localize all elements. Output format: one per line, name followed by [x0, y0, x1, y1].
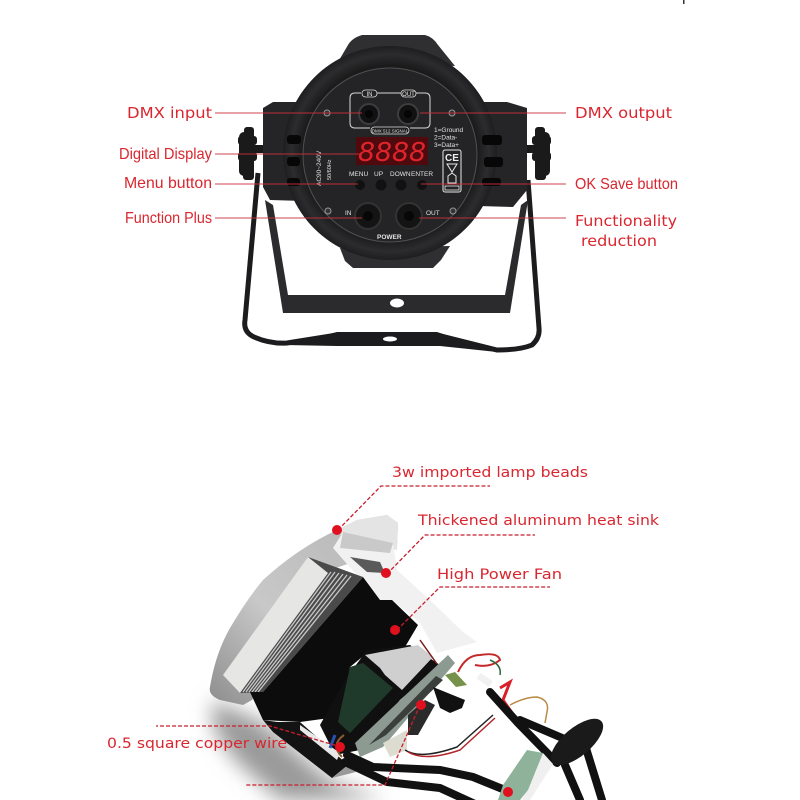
- dmx connector frame: OUT: [402, 92, 415, 98]
- red marker dots: [332, 525, 513, 797]
- left knob: [238, 127, 264, 180]
- internal assembly photo: [210, 515, 611, 800]
- control labels: IN: [345, 210, 352, 217]
- silver circuit heat sink: [365, 645, 433, 690]
- leader lines upper: [215, 113, 566, 218]
- metal driver board: [355, 655, 455, 757]
- control labels: ENTER: [411, 171, 433, 178]
- leader: copper wire: [156, 726, 341, 747]
- connector: [477, 673, 493, 687]
- right knob: [525, 127, 551, 180]
- control labels: DOWN: [390, 171, 411, 178]
- top and bottom housing tabs: [338, 35, 455, 268]
- leader: lamp beads: [338, 486, 490, 530]
- mounting plate: [210, 515, 398, 705]
- label: DMX input: DMX input: [127, 104, 212, 122]
- leader: driver board: [245, 705, 420, 785]
- drop shadow: [212, 700, 385, 800]
- dmx connector frame: DMX 512 SIGNAL: [372, 128, 409, 134]
- outer mounting bracket: [245, 173, 539, 352]
- digital display: 8888: [358, 138, 426, 168]
- fan housing: [250, 577, 418, 722]
- wires: [330, 640, 548, 757]
- label: lamp beads: 3w imported lamp beads: [392, 465, 588, 481]
- control labels: OUT: [426, 210, 440, 217]
- control labels: 50/60Hz: [327, 159, 333, 180]
- label: Function Plus: Function Plus: [125, 210, 212, 227]
- small green board: [498, 750, 553, 800]
- certification marks: CE: [445, 153, 459, 164]
- lower black box: [263, 720, 356, 778]
- control labels: UP: [374, 171, 383, 178]
- control labels: 1=Ground: [434, 127, 463, 134]
- label: OK Save button: OK Save button: [575, 176, 678, 193]
- label: Digital Display: Digital Display: [119, 146, 212, 163]
- control buttons: [355, 180, 427, 190]
- panel screws: [324, 110, 456, 214]
- label: Functionality reduction: reduction: [581, 232, 657, 250]
- upper tab: [337, 515, 398, 550]
- control labels: POWER: [377, 234, 402, 241]
- label: Functionality reduction: Functionality: [575, 212, 677, 230]
- dmx connector frame: [350, 90, 430, 134]
- black cables: [345, 692, 602, 800]
- control labels: 2=Data-: [434, 134, 457, 142]
- white top bracket: [333, 532, 477, 653]
- label: high power fan: High Power Fan: [437, 567, 562, 583]
- control labels: AC90~240V: [316, 150, 323, 186]
- label: copper wire: 0.5 square copper wire: [107, 736, 287, 752]
- label: Menu button: Menu button: [124, 175, 212, 192]
- round housing: [283, 46, 497, 260]
- control labels: 3=Data+: [434, 142, 459, 149]
- side vents: [287, 135, 503, 186]
- label: DMX output: DMX output: [575, 104, 672, 122]
- fixture rear view: [238, 35, 551, 352]
- heat sink face: [223, 557, 328, 693]
- control labels: MENU: [349, 171, 368, 178]
- label: Functionality reduction: [575, 212, 677, 250]
- leader: fan: [397, 587, 550, 630]
- power sockets: [355, 203, 422, 229]
- green capacitor board: [338, 663, 393, 733]
- dmx sockets: [359, 104, 418, 124]
- leader: heat sink: [387, 535, 535, 574]
- heat sink fins: [240, 557, 363, 693]
- bracket metal piece: [340, 532, 393, 573]
- yoke side blocks: [263, 102, 527, 207]
- dmx connector frame: IN: [366, 92, 372, 98]
- label: heat sink: Thickened aluminum heat sink: [417, 513, 660, 529]
- inner mounting bracket: [265, 200, 528, 313]
- bracket holes: [383, 298, 404, 342]
- control labels: [316, 127, 463, 241]
- capacitors: [433, 687, 465, 713]
- rear disc: [543, 711, 611, 773]
- dark interior behind boards: [320, 645, 440, 755]
- certification marks: [443, 150, 461, 192]
